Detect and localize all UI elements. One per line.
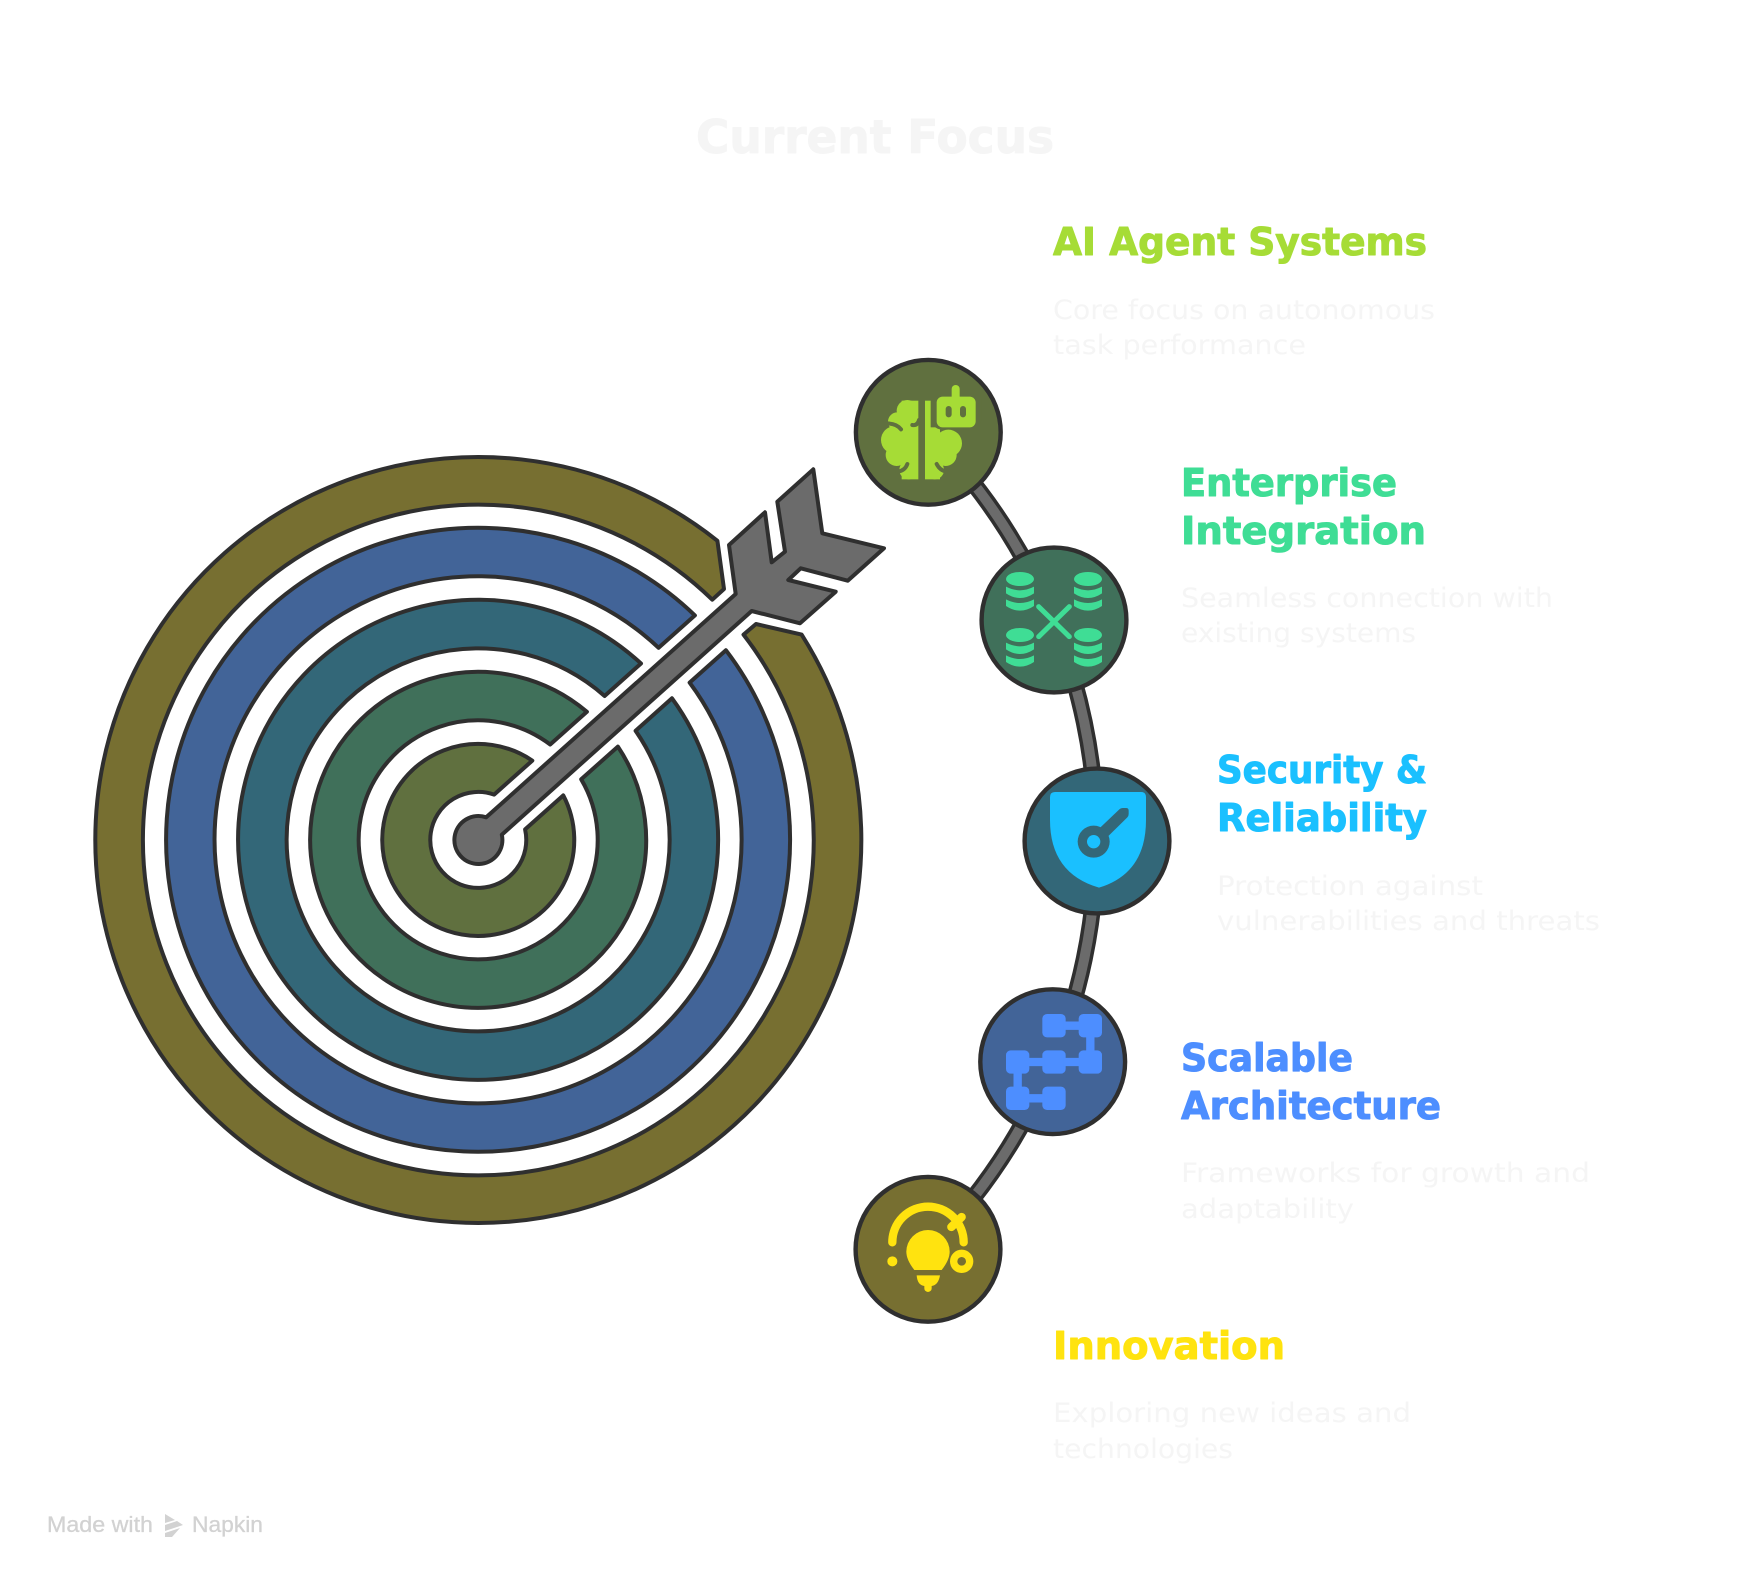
icon: block architecture (1006, 1014, 1102, 1110)
text block: Enterprise Integration: Integration (1181, 509, 1426, 553)
node: Enterprise Integration (982, 548, 1126, 692)
node: Scalable Architecture (980, 989, 1125, 1134)
arrow (454, 469, 884, 864)
text block: Innovation (1053, 1324, 1411, 1465)
title: Current Focus (696, 110, 1054, 164)
text block: Security & Reliability (1217, 748, 1600, 937)
text block: Security & Reliability: Reliability (1217, 796, 1427, 840)
text block: Scalable Architecture (1181, 1036, 1590, 1225)
icon: light bulb (887, 1207, 970, 1292)
text block: Innovation: Exploring new ideas and (1053, 1398, 1411, 1429)
ring: outer olive (95, 457, 861, 1223)
text block: AI Agent Systems: Core focus on autonomous (1053, 295, 1435, 326)
icon: Napkin logo (165, 1514, 183, 1537)
text block: Scalable Architecture: Architecture (1181, 1084, 1441, 1128)
ring: blue (166, 528, 790, 1152)
ring: teal (238, 600, 718, 1080)
icon: connected databases (1006, 572, 1102, 667)
text block: Enterprise Integration: Enterprise (1181, 461, 1397, 505)
text block: Innovation: Innovation (1053, 1324, 1285, 1368)
node: AI Agent Systems (856, 360, 1001, 505)
text block: Scalable Architecture: adaptability (1181, 1194, 1354, 1225)
text block: Enterprise Integration: existing systems (1181, 618, 1416, 649)
text block: Scalable Architecture: Scalable (1181, 1036, 1353, 1080)
target with arrow (95, 457, 884, 1223)
footer: Made with Napkin (47, 1512, 263, 1537)
text block: Security & Reliability: vulnerabilities and threats (1217, 906, 1600, 937)
text block: Security & Reliability: Security & (1217, 748, 1427, 792)
text block: Enterprise Integration: Seamless connection with (1181, 583, 1553, 614)
ring: inner olive (382, 744, 574, 936)
text block: Security & Reliability: Protection against (1217, 871, 1483, 902)
footer: Made with Napkin: Made with (47, 1512, 153, 1537)
text block: AI Agent Systems: AI Agent Systems (1053, 220, 1427, 264)
text block: Scalable Architecture: Frameworks for growth and (1181, 1158, 1590, 1189)
icon: shield with key (1050, 792, 1146, 888)
node: Security & Reliability (1025, 769, 1169, 913)
text block: AI Agent Systems: task performance (1053, 330, 1306, 361)
text block: Innovation: technologies (1053, 1434, 1233, 1465)
text block: AI Agent Systems (1053, 220, 1435, 361)
connector arc (928, 432, 1096, 1249)
node: Innovation (856, 1177, 1000, 1322)
footer: Made with Napkin: Napkin (192, 1512, 263, 1537)
icon: brain and robot (881, 389, 981, 479)
text block: Enterprise Integration (1181, 461, 1553, 649)
ring: green (310, 672, 646, 1008)
